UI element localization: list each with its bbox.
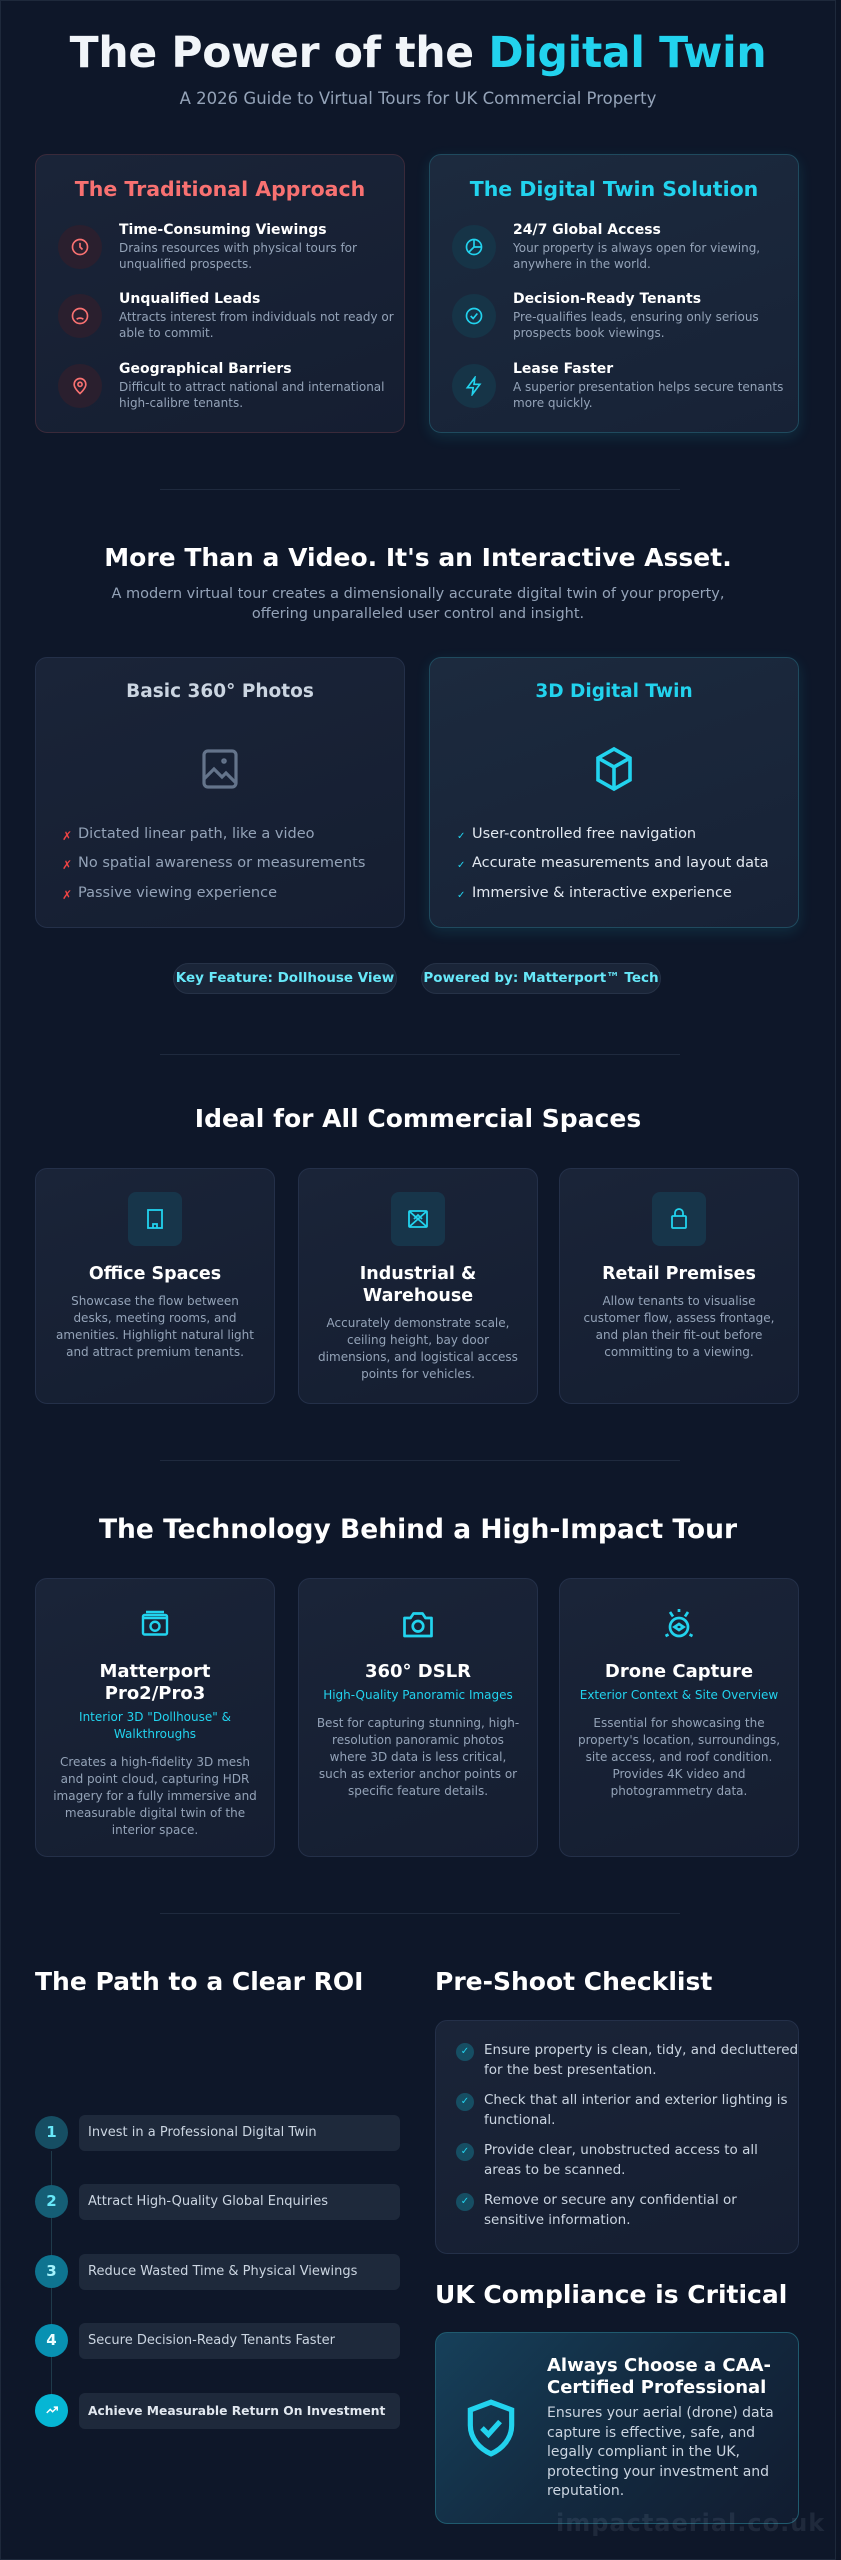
panel: CAA callout (435, 2332, 799, 2524)
step 2: Attract High-Quality Global Enquiries (88, 2194, 328, 2209)
card: retail: Retail Premises (602, 1264, 756, 1284)
card: office: Office Spaces (89, 1264, 221, 1284)
step 1 (35, 2115, 400, 2151)
step 1: Invest in a Professional Digital Twin (88, 2125, 317, 2140)
item: 24/7 access: Your property is always open for viewing, anywhere in the world. (513, 241, 760, 271)
list: pros: User-controlled free navigation (472, 826, 696, 842)
card: office (35, 1168, 275, 1404)
card: dslr (298, 1578, 538, 1857)
checklist items: ✓ (461, 2196, 469, 2207)
item: 24/7 access: 24/7 Global Access (513, 222, 661, 238)
item: geographical barriers: Geographical Barriers (119, 361, 292, 377)
card: industrial: Accurately demonstrate scale, ceiling height, bay door dimensions, and logistical access points for vehicles. (318, 1316, 518, 1381)
card: matterport (35, 1578, 275, 1857)
item: decision-ready: Pre-qualifies leads, ensuring only serious prospects book viewings. (513, 310, 759, 340)
list: pros: ✓ (457, 860, 465, 871)
cards: spaces (35, 1168, 799, 1404)
checklist items: Check that all interior and exterior lighting is functional. (484, 2092, 788, 2128)
heading: Basic 360° Photos (126, 681, 314, 702)
list: cons: Dictated linear path, like a video (78, 826, 315, 842)
card: industrial (298, 1168, 538, 1404)
card: dslr: 360° DSLR (365, 1661, 471, 1682)
list: cons: ✗ (62, 858, 72, 872)
item: lease faster: A superior presentation helps secure tenants more quickly. (513, 380, 783, 410)
card: matterport: Interior 3D "Dollhouse" & Walkthroughs (79, 1710, 231, 1741)
card: matterport: Creates a high-fidelity 3D mesh and point cloud, capturing HDR imagery for a fully immersive and measurable digital twin of the interior space. (53, 1755, 257, 1837)
pill: dollhouse (173, 963, 397, 994)
panel: basic 360 photos (35, 657, 405, 928)
heading: solution: The Digital Twin Solution (470, 177, 758, 201)
item: lease faster: Lease Faster (513, 361, 613, 377)
step 4: Secure Decision-Ready Tenants Faster (88, 2333, 335, 2348)
pill: matterport (421, 963, 661, 994)
icon: cube (596, 746, 632, 792)
item: 24/7 access (452, 222, 760, 271)
list: pros: Immersive & interactive experience (472, 885, 732, 901)
heading: 3D Digital Twin (535, 681, 693, 702)
callout title: Always Choose a CAA-Certified Professional (547, 2355, 771, 2398)
checklist items: Ensure property is clean, tidy, and decluttered for the best presentation. (484, 2042, 798, 2078)
step 3: 3 (46, 2262, 57, 2280)
item: lease faster (452, 361, 783, 410)
pill: dollhouse: Key Feature: Dollhouse View (176, 970, 394, 986)
panel: 3D digital twin (429, 657, 799, 928)
checklist items: ✓ (461, 2146, 469, 2157)
item: time-consuming (58, 222, 357, 271)
step 2 (35, 2184, 400, 2220)
card: office: Showcase the flow between desks, meeting rooms, and amenities. Highlight natural light and attract premium tenants. (56, 1294, 254, 1359)
item: unqualified leads: Attracts interest from individuals not ready or able to commit. (119, 310, 394, 340)
heading: checklist: Pre-Shoot Checklist (435, 1967, 712, 1996)
list: cons: ✗ (62, 829, 72, 843)
step 2: 2 (46, 2192, 57, 2210)
card: drone: Exterior Context & Site Overview (580, 1688, 778, 1702)
callout text: Ensures your aerial (drone) data capture is effective, safe, and legally compliant in the UK, protecting your investment and reputation. (547, 2405, 774, 2499)
item: unqualified leads: Unqualified Leads (119, 291, 260, 307)
step 5 (35, 2393, 400, 2429)
heading: traditional: The Traditional Approach (75, 177, 365, 201)
panel: traditional approach (35, 154, 405, 433)
card: drone: Essential for showcasing the property's location, surroundings, site access, and roof condition. Provides 4K video and photogrammetry data. (578, 1716, 780, 1798)
item: decision-ready (452, 291, 759, 340)
icon: shield (468, 2399, 514, 2457)
item: decision-ready: Decision-Ready Tenants (513, 291, 701, 307)
card: retail (559, 1168, 799, 1404)
card: retail: Allow tenants to visualise customer flow, assess frontage, and plan their fit-out before committing to a viewing. (584, 1294, 774, 1359)
heading: technology: The Technology Behind a High-Impact Tour (99, 1514, 737, 1545)
item: geographical barriers (58, 361, 384, 410)
panel: checklist (435, 2020, 799, 2254)
card: industrial: Industrial & Warehouse (360, 1264, 476, 1306)
step 4 (35, 2323, 400, 2359)
card: matterport: Matterport Pro2/Pro3 (99, 1661, 211, 1704)
list: pros: ✓ (457, 831, 465, 842)
title: The Power of the Digital Twin (70, 29, 766, 78)
panel: digital twin solution (429, 154, 799, 433)
item: time-consuming: Drains resources with physical tours for unqualified prospects. (119, 241, 357, 271)
checklist items: Remove or secure any confidential or sensitive information. (484, 2192, 737, 2228)
checklist items: Provide clear, unobstructed access to all areas to be scanned. (484, 2142, 758, 2178)
checklist items (456, 2042, 798, 2228)
heading: UK compliance: UK Compliance is Critical (435, 2280, 787, 2309)
checklist items: ✓ (461, 2096, 469, 2107)
card: dslr: High-Quality Panoramic Images (323, 1688, 513, 1702)
list: pros: ✓ (457, 890, 465, 901)
pill: matterport: Powered by: Matterport™ Tech (423, 970, 659, 986)
step 4: 4 (46, 2331, 57, 2349)
card: drone: Drone Capture (605, 1661, 753, 1682)
step 5: Achieve Measurable Return On Investment (88, 2404, 385, 2418)
list: pros (457, 826, 769, 901)
heading: path to ROI: The Path to a Clear ROI (35, 1967, 363, 1996)
item: geographical barriers: Difficult to attract national and international high-calibre tenants. (119, 380, 384, 410)
item: unqualified leads (58, 291, 394, 340)
list: pros: Accurate measurements and layout data (472, 855, 769, 871)
list: cons: ✗ (62, 888, 72, 902)
watermark: impactaerial.co.uk (556, 2509, 825, 2537)
cards: technology (35, 1578, 799, 1857)
card: drone (559, 1578, 799, 1857)
heading: commercial spaces: Ideal for All Commercial Spaces (195, 1104, 641, 1133)
step 3: Reduce Wasted Time & Physical Viewings (88, 2264, 357, 2279)
list: cons: Passive viewing experience (78, 885, 277, 901)
checklist items: ✓ (461, 2046, 469, 2057)
timeline: ROI steps (35, 2115, 400, 2429)
step 3 (35, 2254, 400, 2290)
list: cons: No spatial awareness or measurements (78, 855, 365, 871)
step 1: 1 (46, 2123, 57, 2141)
intro text: A modern virtual tour creates a dimensionally accurate digital twin of your property, offering unparalleled user control and insight. (112, 586, 724, 622)
list: cons (62, 826, 365, 902)
icon: image (202, 749, 238, 789)
subtitle: A 2026 Guide to Virtual Tours for UK Commercial Property (180, 89, 656, 108)
card: dslr: Best for capturing stunning, high-resolution panoramic photos where 3D data is less critical, such as exterior anchor points or specific feature details. (317, 1716, 519, 1798)
heading: more than a video: More Than a Video. It's an Interactive Asset. (104, 543, 732, 572)
item: time-consuming: Time-Consuming Viewings (119, 222, 327, 238)
